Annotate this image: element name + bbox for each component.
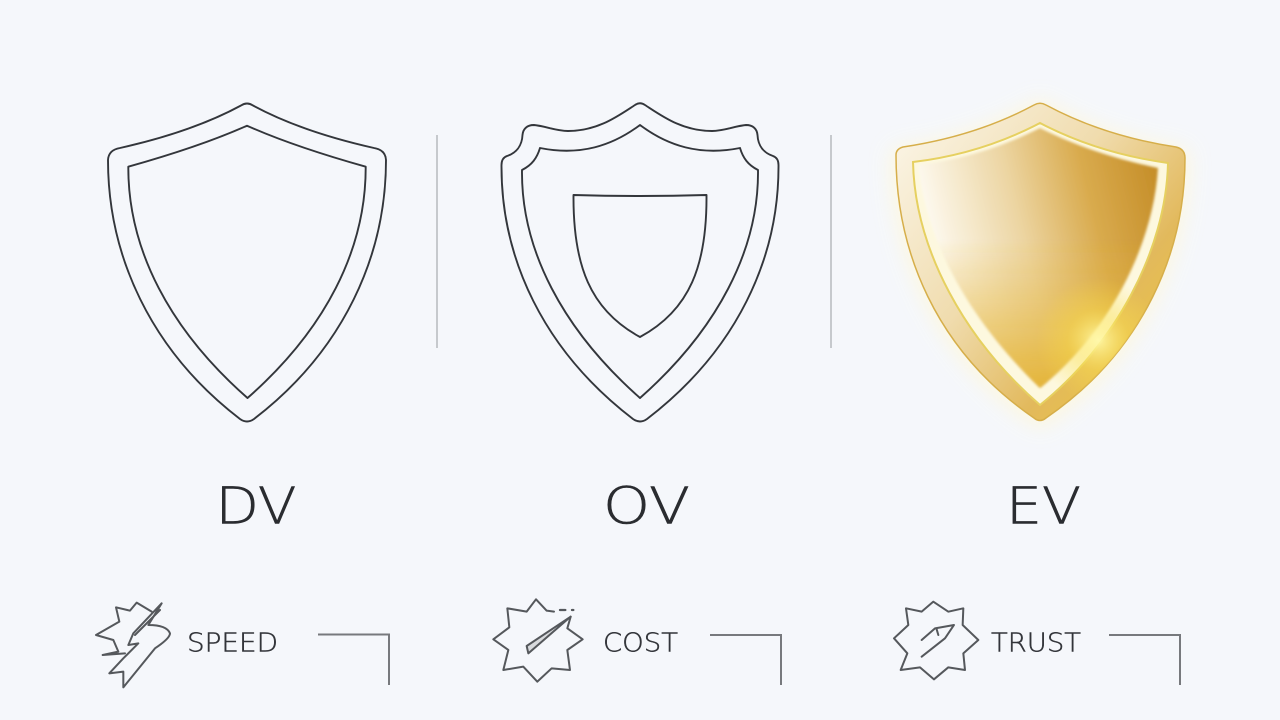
cost label: COST: [603, 628, 678, 658]
EV label: EV: [1006, 478, 1081, 536]
core lower tone: [918, 128, 1158, 388]
EV gold shield: [892, 100, 1188, 428]
DV label: DV: [216, 478, 296, 536]
corner bracket: [1109, 635, 1180, 685]
DV column: [108, 104, 386, 536]
light flare: [896, 103, 1185, 420]
trust item: [894, 602, 1180, 685]
icon: starburst arrow: [493, 599, 583, 682]
icon: lightning burst: [96, 603, 170, 687]
speed label: SPEED: [187, 628, 278, 658]
OV column: [501, 103, 779, 536]
speed item: [96, 603, 389, 687]
divider: [830, 135, 832, 348]
icon: starburst feather: [894, 602, 978, 679]
cost item: [493, 599, 781, 685]
corner bracket: [318, 634, 389, 685]
gold rim: [896, 103, 1185, 420]
divider: [436, 135, 438, 348]
trust label: TRUST: [991, 628, 1081, 658]
corner bracket: [710, 635, 781, 685]
OV outline shield with inner crest: [501, 103, 779, 422]
OV label: OV: [603, 478, 690, 536]
DV outline shield: [108, 104, 386, 422]
gold core: [918, 128, 1158, 388]
inner bright band: [913, 123, 1168, 405]
EV column: [892, 100, 1188, 536]
glow: [892, 100, 1188, 428]
